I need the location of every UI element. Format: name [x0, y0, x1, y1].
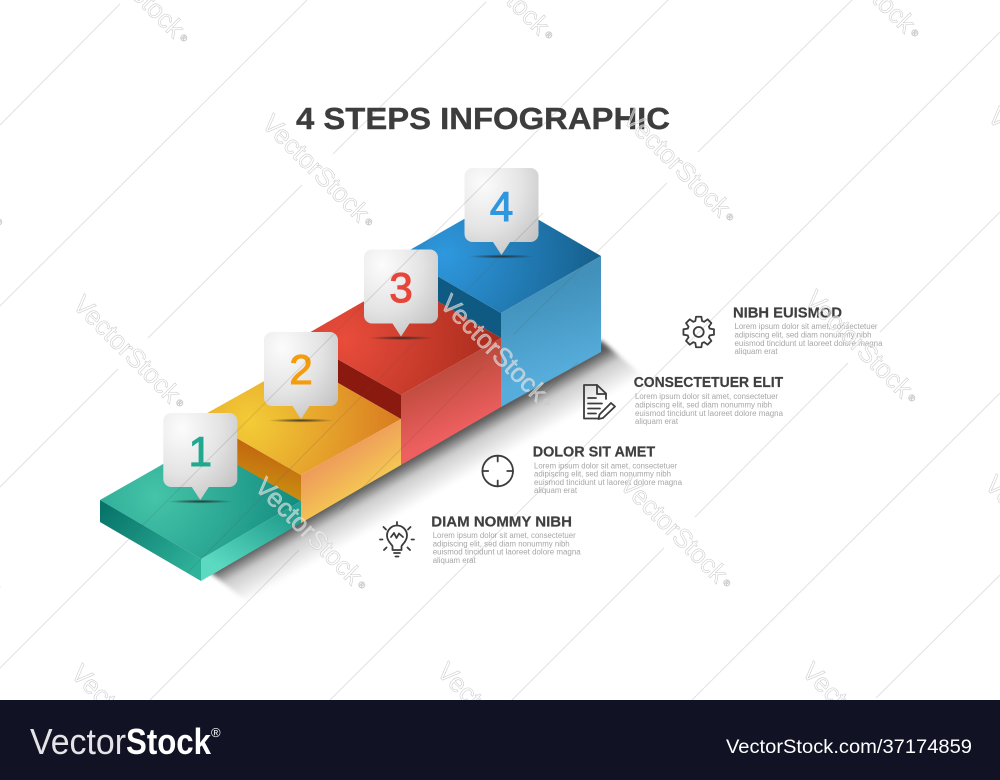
- body text: adipiscing elit, sed diam nonummy nibh: [534, 470, 671, 479]
- body text: [635, 392, 784, 426]
- body text: adipiscing elit, sed diam nonummy nibh: [433, 539, 570, 548]
- body text: Lorem ipsum dolor sit amet, consectetuer: [635, 392, 778, 401]
- body text: aliquam erat: [433, 556, 476, 565]
- icon: target: [482, 456, 513, 486]
- watermark text: ®: [906, 392, 918, 404]
- watermark text: ®: [356, 579, 368, 591]
- step: consectetuer elit: [584, 375, 784, 426]
- body text: aliquam erat: [734, 347, 778, 356]
- step: nibh euismod: [683, 306, 883, 356]
- title: 4 STEPS INFOGRAPHIC: [296, 101, 670, 136]
- body text: aliquam erat: [534, 486, 578, 495]
- step 2 block: yellow: [200, 361, 401, 523]
- watermark text: VectorStock: [249, 471, 369, 590]
- watermark text: VectorStock: [799, 284, 919, 403]
- watermark text: VectorStock: [67, 289, 187, 408]
- watermark text: ®: [172, 766, 184, 778]
- pin 4: 4: [490, 183, 513, 230]
- step: dolor sit amet: [482, 445, 683, 495]
- watermark text: VectorStock: [65, 658, 185, 777]
- body text: euismod tincidunt ut laoreet dolore magna: [635, 409, 784, 418]
- body text: adipiscing elit, sed diam nonummy nibh: [734, 330, 872, 340]
- pin 3: [364, 250, 438, 340]
- body text: [433, 531, 581, 565]
- watermark text: ®: [543, 29, 555, 41]
- pin 3: 3: [389, 264, 413, 311]
- watermark text: ®: [909, 27, 921, 39]
- body text: euismod tincidunt ut laoreet dolore magna: [433, 548, 581, 556]
- body text: euismod tincidunt ut laoreet dolore magna: [734, 339, 883, 348]
- body text: aliquam erat: [635, 417, 679, 426]
- watermark text: VectorStock: [431, 656, 551, 775]
- body text: adipiscing elit, sed diam nonummy nibh: [635, 400, 772, 410]
- pin 1: 1: [189, 428, 212, 475]
- watermark text: ®: [538, 764, 550, 776]
- footer logo: VectorStock: [30, 721, 224, 762]
- heading: DOLOR SIT AMET: [533, 445, 655, 461]
- watermark text: VectorStock: [256, 108, 376, 227]
- pin 4: [464, 168, 538, 258]
- body text: [734, 322, 883, 356]
- watermark text: ®: [174, 397, 186, 409]
- watermark text: ®: [541, 396, 553, 408]
- pin 1: [163, 413, 237, 504]
- step 4 block: blue: [401, 198, 601, 407]
- heading: DIAM NOMMY NIBH: [431, 515, 572, 531]
- heading: CONSECTETUER ELIT: [634, 375, 783, 391]
- watermark text: ®: [903, 764, 915, 776]
- watermark text: ®: [721, 577, 733, 589]
- heading: NIBH EUISMOD: [733, 306, 842, 322]
- body text: Lorem ipsum dolor sit amet, consectetuer: [534, 461, 677, 470]
- icon: document with pencil: [584, 385, 615, 419]
- body text: Lorem ipsum dolor sit amet, consectetuer: [433, 531, 576, 540]
- watermark text: VectorStock: [796, 656, 916, 775]
- icon: light bulb: [380, 522, 414, 556]
- watermark text: VectorStock: [614, 469, 734, 588]
- step 1 block: teal: [100, 443, 301, 581]
- pin 2: [264, 332, 338, 422]
- footer band: [0, 700, 1000, 780]
- body text: euismod tincidunt ut laoreet dolore magna: [534, 478, 683, 487]
- footer logo: ®: [211, 725, 221, 740]
- pin 2: 2: [289, 346, 313, 393]
- watermark text: ®: [178, 32, 190, 44]
- staircase chart: [100, 198, 601, 581]
- step 3 block: red: [300, 280, 501, 465]
- body text: [534, 461, 683, 495]
- icon: gear: [683, 317, 714, 347]
- body text: Lorem ipsum dolor sit amet, consectetuer: [734, 322, 878, 331]
- watermark text: ®: [724, 211, 736, 223]
- watermark text: ®: [363, 216, 375, 228]
- footer url: VectorStock.com/37174859: [726, 736, 972, 758]
- cast shadow under staircase: [207, 340, 645, 608]
- watermark text: VectorStock: [434, 288, 554, 407]
- watermark text: VectorStock: [617, 103, 737, 222]
- step: diam nommy nibh: [380, 515, 581, 565]
